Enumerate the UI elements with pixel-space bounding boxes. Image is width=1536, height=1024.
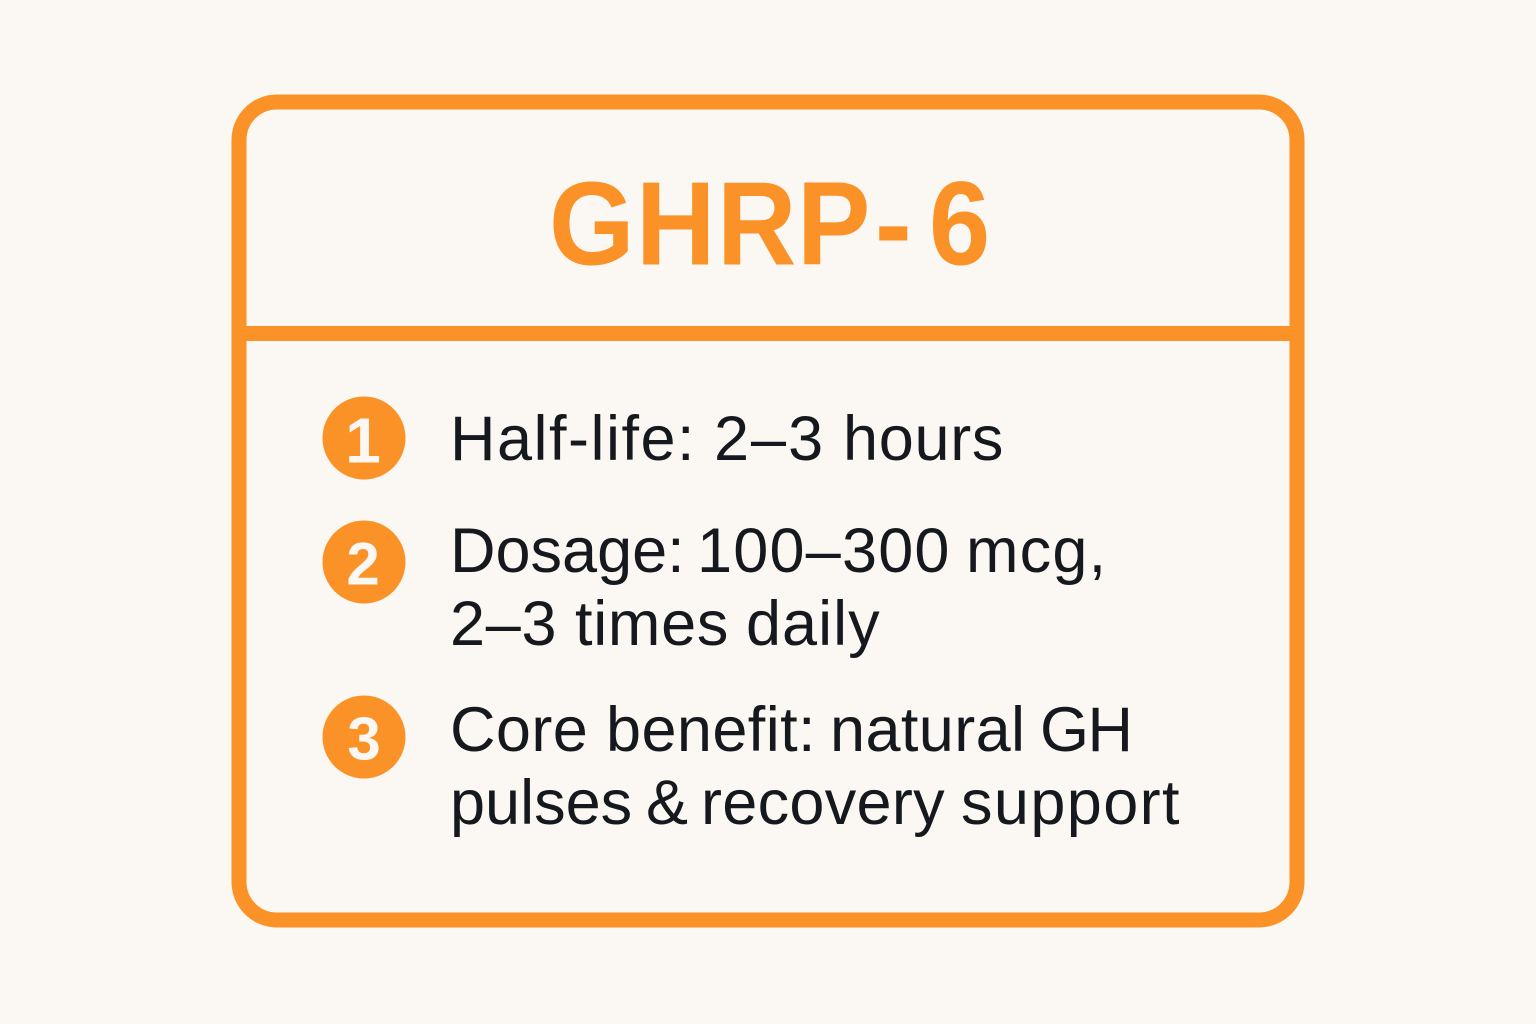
text: core benefit: pulses: [450, 768, 632, 838]
text: core benefit: natural: [830, 695, 1025, 765]
text: dosage: Dosage:: [450, 516, 685, 586]
text: dosage: 2–3: [450, 589, 557, 659]
icon: number 2: [322, 520, 406, 604]
text: dosage: [450, 516, 1107, 659]
text: half-life: hours: [843, 404, 1004, 474]
text: half-life: 2–3: [714, 404, 825, 474]
text: dosage: mcg,: [966, 516, 1107, 586]
text: core benefit: support: [961, 768, 1181, 838]
icon: number 3: [322, 696, 406, 778]
item 1: [322, 396, 1004, 480]
text: dosage: times: [575, 589, 729, 659]
text: core benefit: GH: [1040, 695, 1132, 765]
card panel: [239, 102, 1297, 920]
icon: number 1: [322, 396, 406, 480]
text: core benefit: recovery: [701, 768, 945, 838]
text: core benefit: [450, 695, 1181, 838]
text: core benefit: Core benefit:: [450, 695, 816, 765]
title: GHRP-6: [549, 158, 990, 290]
icon: number 2: 2: [346, 530, 380, 598]
icon: number 3: 3: [347, 706, 381, 772]
text: dosage: 100–300: [697, 516, 951, 586]
item 2: [322, 516, 1107, 659]
item 3: [322, 695, 1181, 838]
text: dosage: daily: [746, 589, 881, 659]
icon: number 1: 1: [345, 404, 381, 476]
text: half-life: Half-life:: [450, 404, 696, 474]
text: core benefit: &: [646, 768, 688, 838]
